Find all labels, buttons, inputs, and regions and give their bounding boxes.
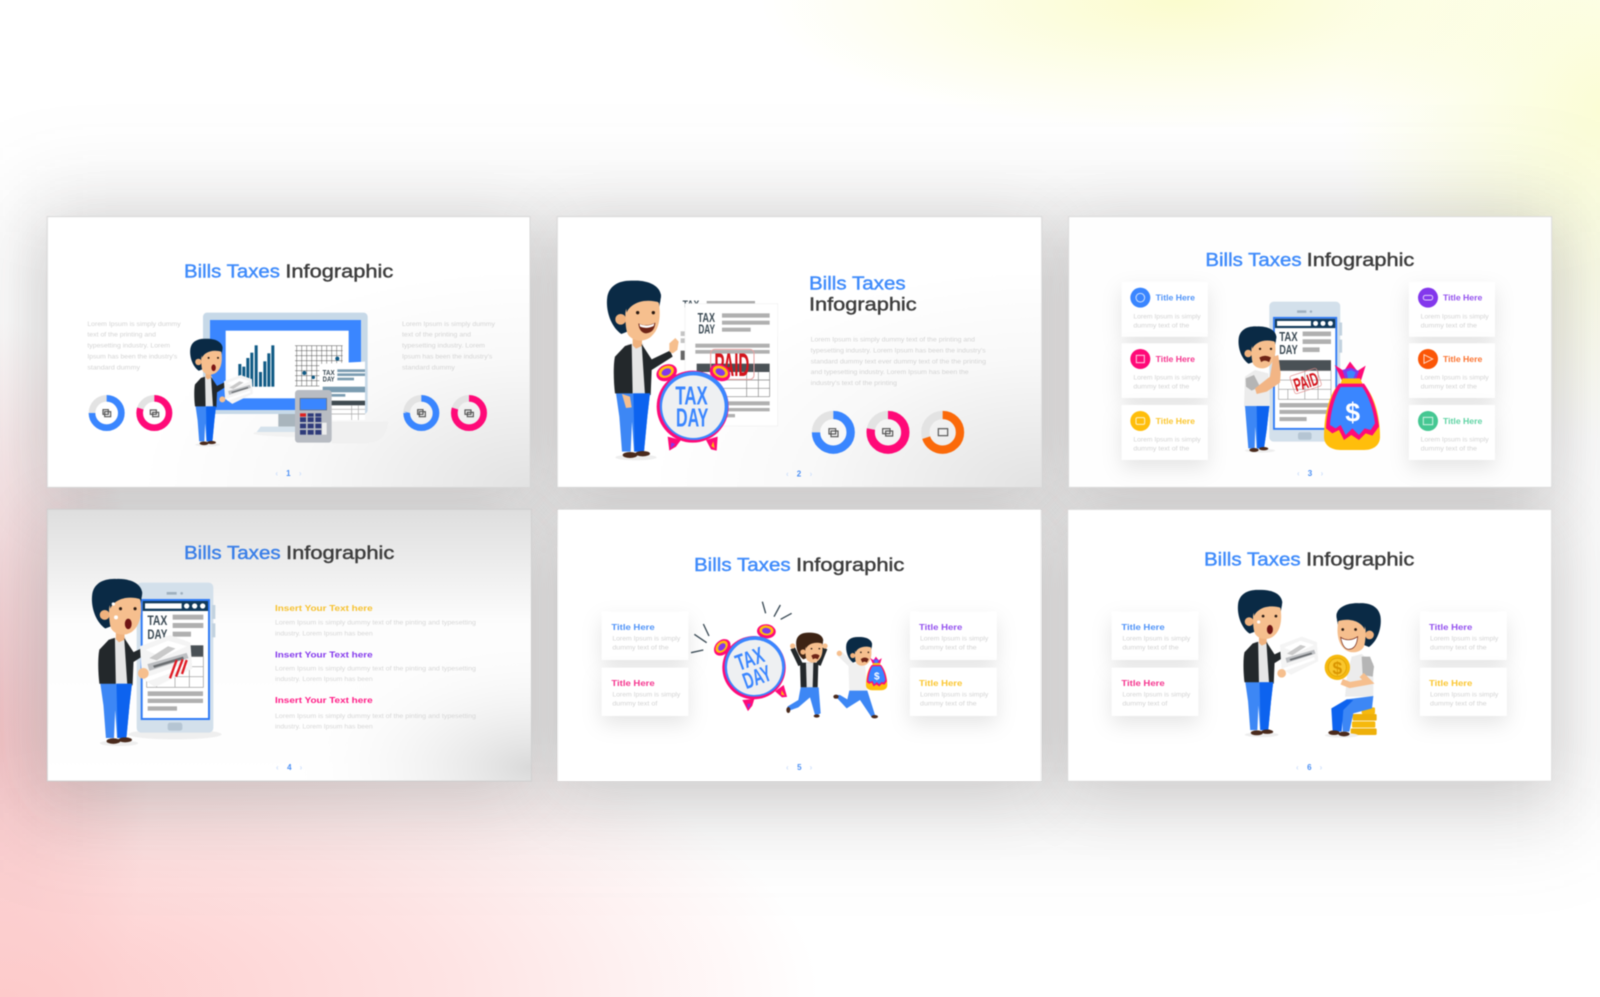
card: yellow bbox=[1122, 405, 1208, 460]
text item: yellow: industry. Lorem Ipsum has been bbox=[275, 630, 373, 637]
slide 1 left text: Ipsum has been the industry's bbox=[87, 354, 178, 361]
text item: yellow: Lorem Ipsum is simply dummy text of the pinting and typesetting bbox=[275, 620, 476, 627]
text item: pink: industry. Lorem Ipsum has been bbox=[275, 724, 373, 731]
card: yellow: Title Here bbox=[1429, 678, 1473, 688]
card: pink: dummy text of bbox=[1122, 701, 1167, 708]
slide 5 running man two with bag bbox=[833, 637, 887, 718]
card: yellow: Title Here bbox=[1156, 416, 1195, 426]
slide 5 running man one bbox=[786, 633, 828, 718]
card: blue: Title Here bbox=[1121, 622, 1165, 632]
slide 5 pager: › bbox=[810, 763, 813, 772]
slide 1 pager: › bbox=[299, 469, 302, 478]
card: blue bbox=[1122, 282, 1208, 337]
text item: yellow bbox=[275, 603, 476, 637]
slide 2 pager: ‹ bbox=[786, 470, 789, 479]
card: yellow: dummy text of the bbox=[1430, 701, 1487, 708]
slide 2 tax document bbox=[672, 292, 778, 426]
slide 3 pager: ‹ bbox=[1297, 469, 1300, 478]
slide 2 body text: industry's text of the printing bbox=[811, 380, 897, 387]
card: orange: dummy text of the bbox=[1421, 384, 1477, 391]
slide 1 pager: 1 bbox=[286, 469, 291, 478]
slide 1 right text: Ipsum has been the industry's bbox=[402, 354, 493, 361]
card: blue bbox=[602, 612, 688, 660]
slide 6: two characters with coins bbox=[1068, 510, 1551, 781]
card: green: Lorem Ipsum is simply bbox=[1421, 437, 1489, 444]
card: purple bbox=[1420, 612, 1507, 660]
slide 2 tax document: TAX bbox=[683, 299, 700, 310]
slide 3 money bag bbox=[1324, 362, 1380, 450]
card: yellow: Title Here bbox=[919, 678, 963, 688]
slide 4 phone bbox=[128, 583, 222, 739]
slide 5 pager: ‹ bbox=[786, 763, 789, 772]
card: purple: Title Here bbox=[1443, 293, 1483, 303]
card: purple: Lorem Ipsum is simply bbox=[1430, 635, 1499, 642]
card: yellow: Lorem Ipsum is simply bbox=[1430, 692, 1499, 699]
slide 6 pager: ‹ bbox=[1296, 763, 1299, 772]
slide 3 paid stamp: PAID bbox=[1291, 368, 1321, 396]
card: yellow bbox=[1420, 668, 1507, 716]
slide 4 title: Bills Taxes bbox=[184, 542, 281, 563]
slide 1 pager: ‹ bbox=[275, 469, 278, 478]
card: purple: dummy text of the bbox=[920, 644, 977, 651]
card: blue: dummy text of the bbox=[1122, 644, 1179, 651]
slide 3 pager bbox=[1297, 469, 1324, 478]
slide 3 phone with tax day bbox=[1269, 302, 1342, 442]
slide 6 pager bbox=[1296, 763, 1323, 772]
card: purple: Lorem Ipsum is simply bbox=[1421, 313, 1489, 320]
slide 6 seated smiling man bbox=[1325, 603, 1381, 738]
slide 1 title: Bills Taxes bbox=[184, 260, 280, 281]
slide 2: tax day clock bbox=[557, 217, 1042, 487]
slide 4 pager bbox=[276, 763, 303, 772]
card: pink bbox=[1112, 668, 1198, 716]
card: pink: Lorem Ipsum is simply bbox=[1122, 692, 1191, 699]
slide 5 ringing lines bbox=[691, 602, 792, 653]
slide 1 right text: Lorem Ipsum is simply dummy bbox=[402, 321, 496, 328]
card: yellow: Lorem Ipsum is simply bbox=[1133, 437, 1201, 444]
slide 1 left text bbox=[87, 321, 181, 371]
slide 5 title: Infographic bbox=[796, 554, 904, 575]
text item: pink: Insert Your Text here bbox=[275, 695, 373, 705]
slide 2 body text: Lorem Ipsum is simply dummy text of the printing and bbox=[811, 337, 975, 344]
card: green: dummy text of the bbox=[1421, 446, 1477, 453]
card: pink: Title Here bbox=[1121, 678, 1165, 688]
card: pink: Title Here bbox=[1156, 354, 1195, 364]
slide 4 title: Infographic bbox=[286, 542, 394, 563]
slide 1 pager bbox=[275, 469, 302, 478]
card: pink: dummy text of the bbox=[1133, 384, 1190, 391]
slide 1 right text: text of the printing and bbox=[402, 332, 471, 339]
card: purple: Title Here bbox=[919, 622, 963, 632]
card: blue: Title Here bbox=[1156, 293, 1195, 303]
slide 2 body text: typesetting industry. Lorem Ipsum has been the industry's bbox=[811, 347, 986, 354]
slide 1 title bbox=[184, 260, 393, 281]
card: pink: Lorem Ipsum is simply bbox=[612, 692, 681, 699]
slide 5 pager: 5 bbox=[797, 763, 802, 772]
slide 5 pager bbox=[786, 763, 813, 772]
slide 4 pager: 4 bbox=[287, 763, 292, 772]
slide 2 title: Bills Taxes bbox=[809, 272, 906, 293]
slide 6 title: Bills Taxes bbox=[1204, 549, 1301, 570]
slide 2 tax document: PAID bbox=[714, 347, 749, 383]
text item: yellow: Insert Your Text here bbox=[275, 603, 373, 613]
card: pink: Title Here bbox=[611, 678, 655, 688]
slide 5: running from tax day bbox=[558, 510, 1041, 781]
slide 1 left text: typesetting industry. Lorem bbox=[87, 343, 170, 350]
card: purple bbox=[1409, 282, 1495, 337]
card: purple bbox=[910, 612, 997, 660]
slide 5 title: Bills Taxes bbox=[694, 554, 791, 575]
card: blue: Lorem Ipsum is simply bbox=[1122, 635, 1191, 642]
text item: pink: Lorem Ipsum is simply dummy text of the pinting and typesetting bbox=[275, 713, 476, 720]
slide 6 coin stack bbox=[1351, 707, 1377, 735]
slide 1 left text: standard dummy bbox=[87, 364, 141, 371]
card: purple: Lorem Ipsum is simply bbox=[920, 635, 989, 642]
card: green bbox=[1409, 405, 1495, 460]
card: yellow: dummy text of the bbox=[1133, 446, 1190, 453]
slide 2 pager bbox=[786, 470, 813, 479]
card: orange: Lorem Ipsum is simply bbox=[1421, 375, 1489, 382]
card: yellow: Lorem Ipsum is simply bbox=[920, 692, 989, 699]
slide 1 left text: Lorem Ipsum is simply dummy bbox=[87, 321, 181, 328]
slide 1 monitor illustration bbox=[203, 313, 388, 443]
slide 5 title bbox=[694, 554, 904, 575]
slide 3 pager: › bbox=[1321, 469, 1324, 478]
card: yellow: dummy text of the bbox=[920, 701, 977, 708]
slide 1 character holding paper bbox=[190, 339, 253, 447]
card: orange bbox=[1409, 343, 1495, 398]
slide 3 title: Infographic bbox=[1307, 249, 1414, 270]
card: pink bbox=[602, 668, 688, 716]
slide 2 title bbox=[809, 272, 917, 315]
slide 1 monitor illustration: TAX bbox=[323, 368, 335, 377]
slide 1 right text: standard dummy bbox=[402, 364, 456, 371]
text item: purple: industry. Lorem Ipsum has been bbox=[275, 676, 373, 683]
slide 1 monitor illustration: DAY bbox=[323, 375, 335, 384]
slide 6 title: Infographic bbox=[1306, 549, 1414, 570]
card: pink: dummy text of bbox=[612, 701, 657, 708]
slide 3 title: Bills Taxes bbox=[1205, 249, 1302, 270]
card: blue: Lorem Ipsum is simply bbox=[612, 635, 681, 642]
card: purple: Title Here bbox=[1429, 622, 1473, 632]
card: orange: Title Here bbox=[1443, 354, 1483, 364]
slide 1 title: Infographic bbox=[285, 260, 393, 281]
slide 1 left text: text of the printing and bbox=[87, 332, 156, 339]
card: blue: Lorem Ipsum is simply bbox=[1133, 313, 1201, 320]
slide 2 pager: 2 bbox=[797, 470, 802, 479]
slide 6 worried man with paper bbox=[1238, 590, 1318, 737]
card: yellow bbox=[910, 668, 997, 716]
slide 2 body text: standard dummy text ever dummy text of the the printing bbox=[811, 358, 986, 365]
card: pink bbox=[1122, 343, 1208, 398]
card: blue: Title Here bbox=[611, 622, 655, 632]
slide 6 gold coin bbox=[1325, 655, 1350, 680]
text item: purple bbox=[275, 649, 476, 683]
slide 6 pager: › bbox=[1320, 763, 1323, 772]
slide 2 tax document: DAY bbox=[698, 322, 715, 336]
slide 2 title: Infographic bbox=[809, 294, 917, 315]
slide 3 pager: 3 bbox=[1308, 469, 1313, 478]
slide 1: monitor with donuts bbox=[47, 217, 530, 487]
text item: purple: Lorem Ipsum is simply dummy text of the pinting and typesetting bbox=[275, 665, 476, 672]
text item: purple: Insert Your Text here bbox=[275, 649, 373, 659]
card: purple: dummy text of the bbox=[1421, 322, 1477, 329]
slide 3: six icon cards around phone bbox=[1069, 217, 1552, 487]
slide 6 pager: 6 bbox=[1307, 763, 1312, 772]
slide 4 pager: › bbox=[300, 763, 303, 772]
slide 2 tax document: TAX bbox=[698, 311, 715, 325]
text item: pink bbox=[275, 695, 476, 731]
slide 1 right text: typesetting industry. Lorem bbox=[402, 343, 485, 350]
slide 2 donut charts bbox=[816, 415, 960, 450]
slide 2 body text: and typesetting industry. Lorem Ipsum has been the bbox=[811, 369, 969, 376]
slide 1 right text bbox=[402, 321, 496, 371]
slide 4 character bbox=[92, 579, 192, 746]
slide 4: phone and three text items bbox=[47, 509, 531, 781]
slide 3 worried character bbox=[1239, 326, 1281, 453]
slide 6 title bbox=[1204, 549, 1414, 570]
card: blue: dummy text of the bbox=[1133, 322, 1190, 329]
card: blue: dummy text of the bbox=[612, 644, 669, 651]
slide 1 donut charts bbox=[92, 398, 484, 428]
slide 4 title bbox=[184, 542, 394, 563]
slide 3 title bbox=[1205, 249, 1414, 270]
slide 2 body text bbox=[811, 337, 986, 387]
slide 5 tilted alarm clock bbox=[708, 618, 801, 716]
card: pink: Lorem Ipsum is simply bbox=[1133, 375, 1201, 382]
slide 2 happy character bbox=[607, 281, 679, 460]
slide 3 paid stamp bbox=[1289, 367, 1322, 396]
card: blue bbox=[1112, 612, 1198, 660]
slide 2 alarm clock bbox=[654, 361, 733, 451]
card: green: Title Here bbox=[1443, 416, 1483, 426]
slide 6 gold coin: $ bbox=[1333, 658, 1343, 678]
slide 2 pager: › bbox=[810, 470, 813, 479]
slide 4 pager: ‹ bbox=[276, 763, 279, 772]
card: purple: dummy text of the bbox=[1430, 644, 1487, 651]
